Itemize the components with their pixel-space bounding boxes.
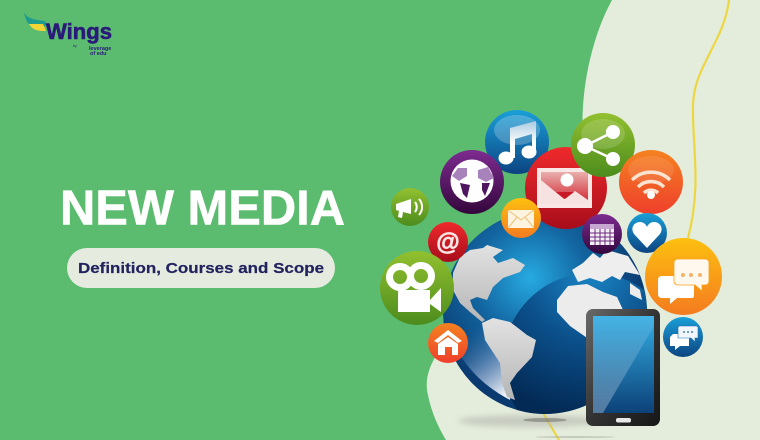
photo frame <box>537 168 592 208</box>
icon: home <box>428 323 468 363</box>
back bubble <box>658 276 694 304</box>
arabia <box>630 283 642 300</box>
ground shadow <box>458 415 615 438</box>
globe <box>443 220 647 414</box>
icon: share <box>571 113 635 177</box>
logo tagline: by <box>73 44 77 48</box>
logo wordmark: Wings <box>46 19 112 44</box>
logo <box>24 12 112 57</box>
icon: megaphone <box>391 188 429 226</box>
africa <box>557 284 624 340</box>
screen reflection <box>593 316 654 413</box>
front bubble <box>674 259 709 291</box>
icon: heart <box>627 213 667 253</box>
logo tagline: of edu <box>90 51 106 57</box>
logo tagline <box>73 44 111 57</box>
subtitle pill: Definition, Courses and Scope <box>78 260 324 277</box>
icon: world globe <box>440 150 504 214</box>
south america <box>482 318 536 400</box>
icon: blue chat <box>663 317 703 357</box>
icon: at sign: @ <box>436 229 460 256</box>
logo flag icon <box>24 12 47 31</box>
inner sphere <box>510 275 647 414</box>
subtitle pill <box>67 248 335 288</box>
europe and asia <box>572 250 640 282</box>
icon: music <box>485 110 549 174</box>
title: NEW MEDIA <box>60 182 345 236</box>
icon: red photo <box>525 147 607 229</box>
pale curved background panel <box>427 0 760 440</box>
icon: orange chat <box>645 238 722 315</box>
icon: wifi <box>619 150 683 214</box>
logo tagline: leverage <box>89 46 111 52</box>
phone screen <box>593 316 654 413</box>
icon: video camera <box>380 251 454 325</box>
phone <box>586 309 660 426</box>
icon: at sign <box>428 222 468 262</box>
home button <box>616 418 631 422</box>
icon: calendar <box>582 214 622 254</box>
yellow decorative curve <box>543 0 729 440</box>
north america <box>453 245 525 322</box>
icon: envelope <box>501 198 541 238</box>
lower-left highlight crescent <box>462 332 510 400</box>
